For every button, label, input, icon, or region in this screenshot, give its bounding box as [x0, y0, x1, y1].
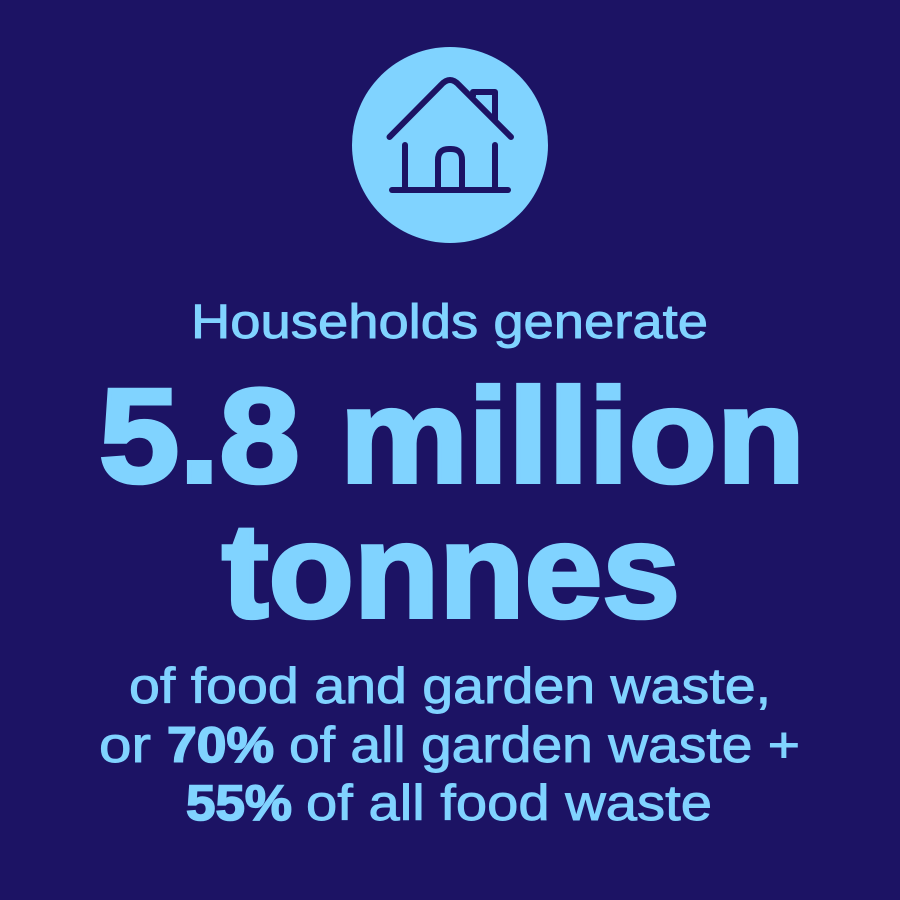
icon: house in circle	[352, 47, 548, 243]
headline: 5.8 million: 5.8 million	[99, 362, 805, 511]
description text: 55%	[186, 775, 292, 831]
description text: of all food waste	[306, 775, 712, 831]
description text: 70%	[167, 717, 274, 773]
description text: of all garden waste +	[289, 717, 800, 773]
headline: tonnes: tonnes	[222, 497, 680, 646]
description text	[99, 658, 800, 831]
intro text: Households generate	[191, 296, 708, 349]
description text: of food and garden waste,	[129, 658, 771, 714]
description text: or	[99, 717, 151, 773]
